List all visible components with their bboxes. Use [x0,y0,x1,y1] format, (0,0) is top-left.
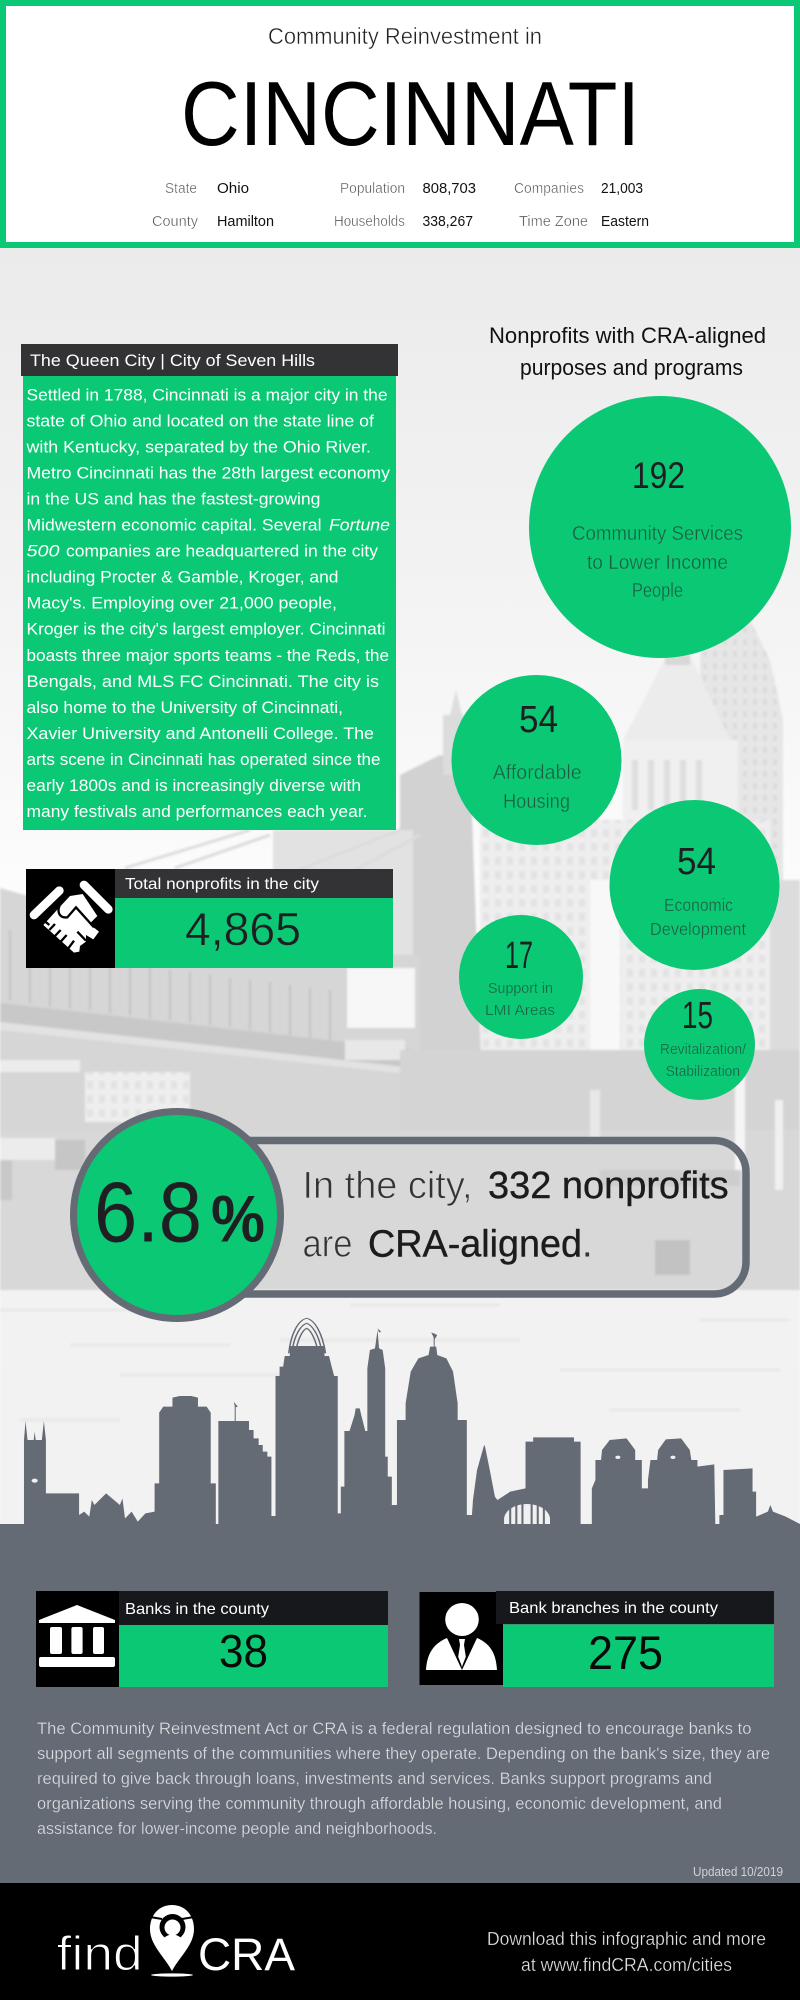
bubble: support in LMI areas 17 [459,915,583,1039]
bubble: support in LMI areas 17: Support in [488,980,553,997]
city facts table: 338,267 [422,214,473,230]
description text block: state of Ohio and located on the state line of [26,412,374,430]
skyline silhouette [24,1318,800,1530]
bubble: affordable housing 54: 54 [519,699,558,741]
footer [0,1883,800,2000]
percentage circle: % [211,1182,265,1256]
description text block: Kroger is the city's largest employer. Cincinnati [26,621,386,639]
stat card: total nonprofits: 4,865 [185,903,301,955]
city facts table: Time Zone [519,214,588,230]
findCRA logo: find [57,1928,143,1981]
updated date: Updated 10/2019 [693,1865,783,1879]
stat card: banks in the county: 38 [219,1625,268,1677]
panel heading bar [21,344,398,376]
download note [487,1929,766,1975]
description text block: arts scene in Cincinnati has operated since the [26,751,380,769]
city facts table: Companies [514,181,584,197]
city facts table: Households [334,214,405,230]
title: Cincinnati: CINCINNATI [181,64,640,165]
city facts table: Population [340,181,405,197]
findCRA logo: CRA [198,1929,295,1980]
percentage circle: 6.8 [94,1166,202,1261]
bubble: revitalization 15: Stabilization [666,1063,740,1080]
stat card: banks in the county [36,1591,388,1687]
text block: about the CRA: support all segments of the communities where they operate. Depending on the bank's size, they are [37,1745,770,1763]
callout statement [302,1165,729,1266]
description text block: early 1800s and is increasingly diverse with [26,777,361,795]
stat card: total nonprofits [26,869,393,968]
icon: bank [39,1605,115,1667]
panel: city description [21,344,398,830]
description text block: Xavier University and Antonelli College. The [26,725,374,743]
download note: Download this infographic and more [487,1929,766,1949]
header panel [0,0,800,245]
bubble: community services 192: to Lower Income [587,552,728,574]
stat card: banks in the county: Banks in the county [125,1601,269,1618]
city facts table: Hamilton [217,214,274,230]
icon: banker [426,1603,497,1670]
callout statement: 332 nonprofits [488,1165,729,1207]
bubble: revitalization 15: 15 [682,995,713,1037]
icon: location pin [150,1905,194,1977]
description text block: Midwestern economic capital. Several [26,517,322,535]
panel heading bar: The Queen City | City of Seven Hills [30,351,315,370]
text block: about the CRA: required to give back through loans, investments and services. Banks support programs and [37,1770,712,1788]
percentage circle [74,1112,280,1318]
stat card: bank branches in the county: Bank branches in the county [509,1600,718,1617]
callout statement: . [582,1224,593,1266]
description text block: with Kentucky, separated by the Ohio River. [25,438,371,456]
city facts table: State [165,181,197,197]
bubble: affordable housing 54: Housing [503,791,570,813]
bubble: revitalization 15 [644,989,755,1100]
bubble: economic development 54: 54 [677,841,716,883]
city facts table: 808,703 [422,181,476,197]
city facts table: County [152,214,199,230]
description text block: in the US and has the fastest-growing [26,491,320,509]
city facts table: Eastern [601,214,649,230]
callout: CRA-aligned percentage [74,1112,746,1318]
stat card: bank branches in the county [420,1591,774,1687]
city facts table: 21,003 [601,181,643,197]
description text block [23,376,396,830]
description text block: boasts three major sports teams - the Reds, the [26,647,389,665]
text block: about the CRA: assistance for lower-income people and neighborhoods. [37,1820,437,1838]
findCRA logo [57,1905,295,1981]
bottom slate panel [0,1524,800,1884]
bubble: community services 192: People [632,580,683,602]
heading: nonprofits with CRA-aligned purposes: purposes and programs [520,355,743,380]
text block: about the CRA: The Community Reinvestment Act or CRA is a federal regulation designed to encourage banks to [37,1720,751,1738]
city facts table [152,181,649,230]
download note: at www.findCRA.com/cities [521,1955,732,1975]
description text block: many festivals and performances each year. [26,803,368,821]
description text block: companies are headquartered in the city [66,543,379,561]
description text block: Bengals, and MLS FC Cincinnati. The city is [26,673,379,691]
bubble: community services 192 [529,396,791,658]
background photo: Cincinnati bridge and skyline [0,248,800,1530]
bubble: economic development 54: Economic [664,895,733,915]
heading: nonprofits with CRA-aligned purposes [489,323,766,380]
bubble: revitalization 15: Revitalization/ [660,1041,747,1058]
callout statement: In the city, [302,1165,472,1207]
description text block: 500 [26,543,60,561]
heading: community reinvestment: Community Reinvestment in [268,23,542,49]
callout statement: are [302,1224,352,1266]
description text block: Macy's. Employing over 21,000 people, [26,595,337,613]
bubble: community services 192: Community Services [572,523,743,545]
callout statement: CRA-aligned [368,1224,582,1266]
description text block: including Procter & Gamble, Kroger, and [26,569,338,587]
bubble: community services 192: 192 [632,455,685,496]
stat card: bank branches in the county: 275 [588,1626,663,1679]
text block: about the CRA [37,1720,770,1838]
text block: about the CRA: organizations serving the community through affordable housing, economic development, and [37,1795,722,1813]
icon: handshake [34,885,108,953]
bubble: economic development 54 [610,800,780,970]
description text block: Settled in 1788, Cincinnati is a major city in the [26,386,388,404]
bubble: economic development 54: Development [650,919,746,939]
bubble: affordable housing 54: Affordable [493,762,582,784]
description text block: Metro Cincinnati has the 28th largest economy [26,465,391,483]
bubble: support in LMI areas 17: LMI Areas [485,1002,555,1019]
bubble: support in LMI areas 17: 17 [505,935,533,977]
description text block: also home to the University of Cincinnati, [26,699,343,717]
stat card: total nonprofits: Total nonprofits in the city [125,876,319,893]
bubble: affordable housing 54 [452,675,622,845]
description text block: Fortune [329,517,390,535]
city facts table: Ohio [217,181,249,197]
heading: nonprofits with CRA-aligned purposes: Nonprofits with CRA-aligned [489,323,766,348]
